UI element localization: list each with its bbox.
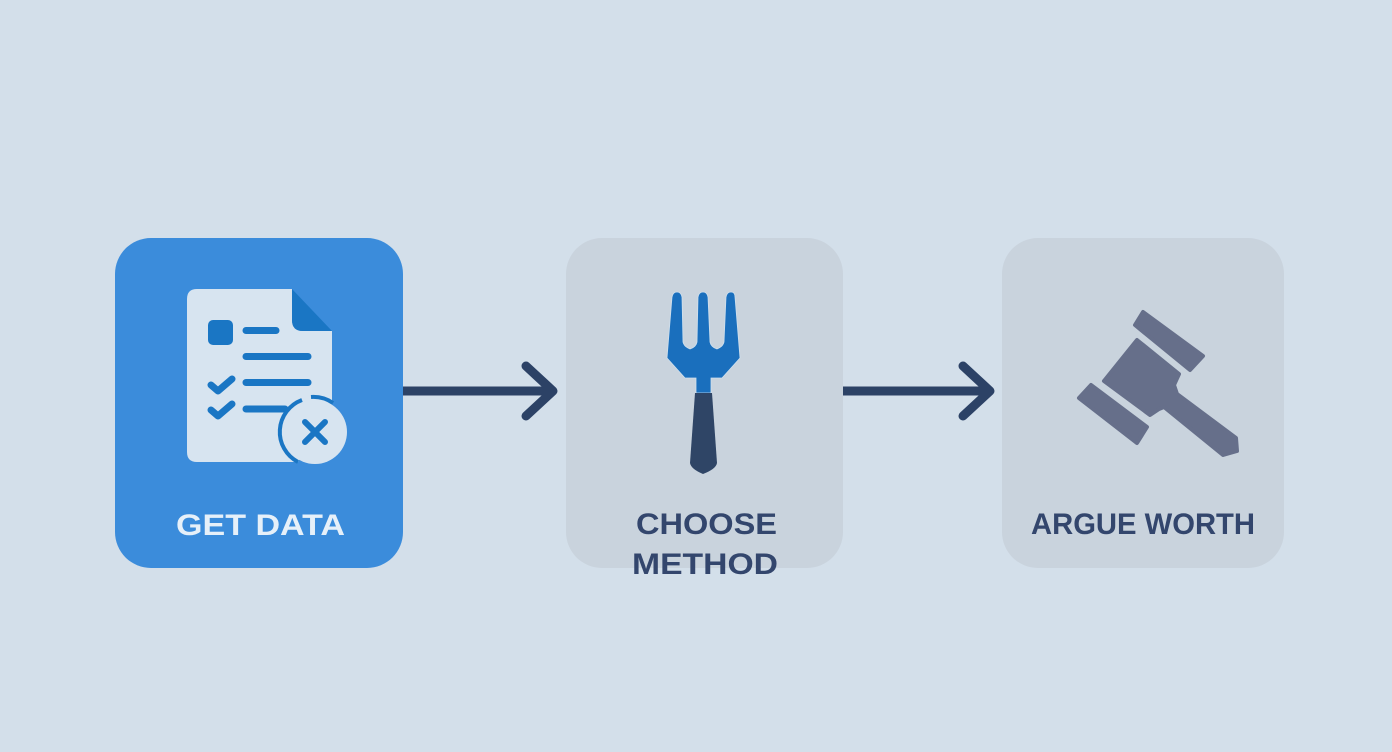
panel: choose method	[566, 238, 843, 581]
panel: argue worth	[1002, 238, 1284, 568]
label: choose method: METHOD	[632, 548, 778, 581]
label: get data: GET DATA	[176, 509, 345, 542]
arrow: get data to choose method	[403, 366, 553, 416]
label: choose method	[632, 508, 778, 581]
label: argue worth: ARGUE WORTH	[1031, 508, 1255, 541]
arrow: choose method to argue worth	[843, 366, 990, 416]
panel: get data	[115, 238, 403, 568]
icon: fork	[667, 292, 740, 474]
icon: document checklist with x badge	[187, 289, 347, 464]
icon: gavel	[1079, 312, 1237, 455]
label: choose method: CHOOSE	[636, 508, 777, 541]
